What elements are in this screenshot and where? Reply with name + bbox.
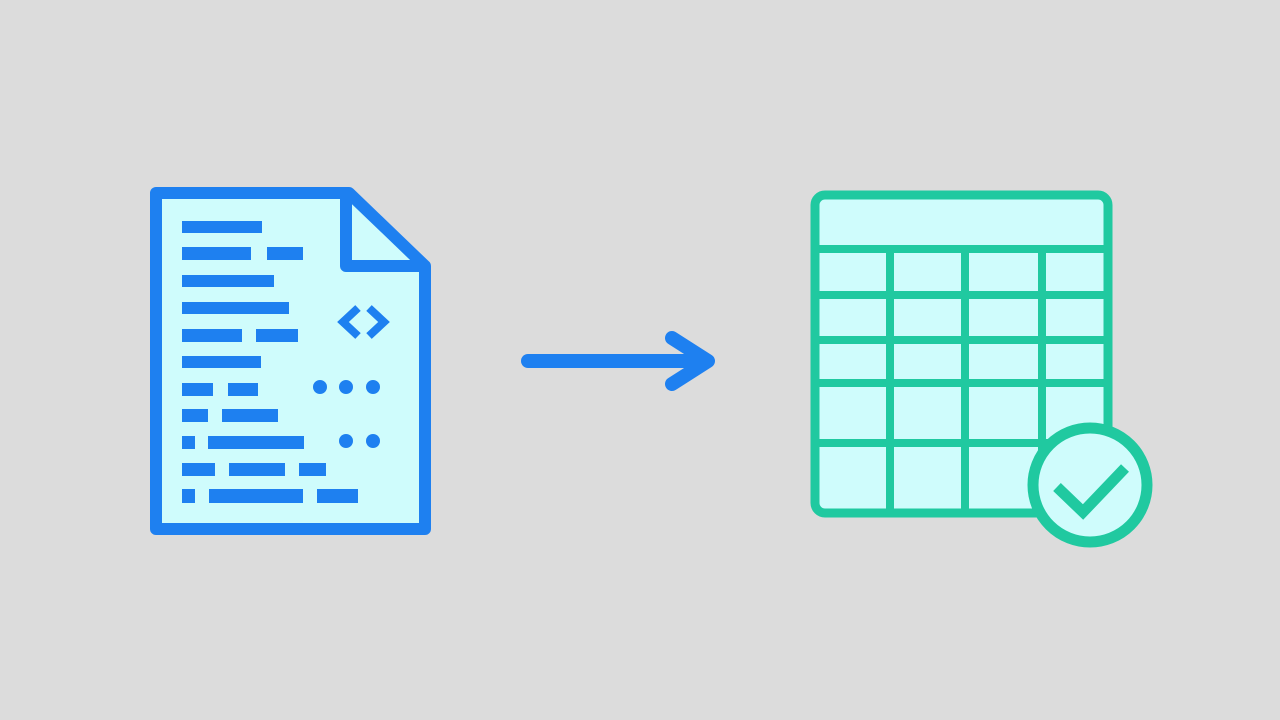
icon: table with check — [815, 195, 1147, 542]
arrow — [528, 338, 708, 384]
icon: code document — [156, 193, 425, 529]
check badge — [1033, 428, 1147, 542]
